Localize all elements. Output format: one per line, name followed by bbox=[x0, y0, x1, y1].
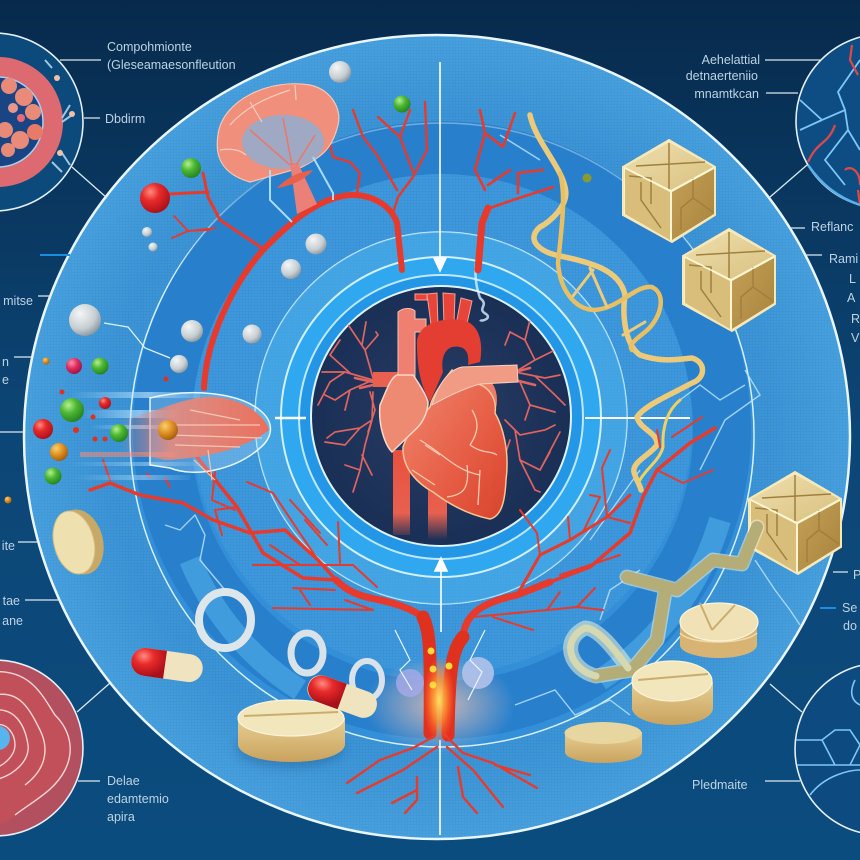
vessel: trunk bbox=[423, 617, 430, 733]
vessel: left main trunk branches bbox=[197, 457, 336, 580]
left atrium bbox=[467, 377, 497, 423]
labels: left: tae bbox=[3, 594, 20, 608]
lung vessels left bbox=[318, 320, 378, 492]
balls: colored molecules bbox=[4, 96, 592, 504]
right atrium bbox=[380, 375, 428, 452]
rings bbox=[199, 592, 382, 699]
vessel: left red ball branch bbox=[170, 173, 262, 248]
molecule chain bbox=[571, 527, 757, 676]
heart bbox=[373, 293, 518, 540]
superior vena cava bbox=[398, 308, 426, 385]
inset: top-left cell bbox=[0, 33, 83, 211]
lung mushroom shape bbox=[217, 84, 339, 222]
labels: top-left: (Gleseamaesonfleution bbox=[107, 58, 236, 72]
labels: right: Rami bbox=[829, 252, 858, 266]
vessel: roots bbox=[347, 735, 537, 813]
labels: top-right bbox=[686, 53, 760, 101]
vessel: arc branches bbox=[328, 102, 427, 213]
vessel: left main bbox=[336, 580, 423, 617]
labels: bottom-left bbox=[107, 774, 169, 824]
labels: top-left: Compohmionte bbox=[107, 40, 192, 54]
labels: left: mitse bbox=[3, 294, 33, 308]
muscle bulb with particle stream bbox=[70, 392, 270, 480]
labels: right: Se bbox=[842, 601, 857, 615]
panel: central heart disc bbox=[311, 263, 571, 546]
labels: top-left: Dbdirm bbox=[105, 112, 145, 126]
labels: left: ite bbox=[2, 539, 15, 553]
coronary vessels bbox=[412, 410, 497, 505]
labels: left: n bbox=[2, 355, 9, 369]
lung vessels right bbox=[505, 320, 565, 492]
labels: right: do bbox=[843, 619, 857, 633]
ventricles bbox=[403, 370, 507, 519]
vessel: left branches bbox=[103, 460, 377, 610]
stream lines bbox=[70, 392, 200, 398]
glowing haze bbox=[365, 657, 515, 753]
tablet: scored bbox=[632, 661, 713, 725]
labels: bottom-left: Delae bbox=[107, 774, 140, 788]
pulmonary stub bbox=[373, 372, 398, 387]
inset: bottom-left rings bbox=[0, 660, 83, 836]
vessel: right main bbox=[463, 582, 550, 637]
labels: right: V bbox=[851, 331, 860, 345]
balls: grey molecules bbox=[69, 61, 351, 373]
muscle bbox=[120, 397, 269, 460]
tablet: stacked bbox=[680, 603, 758, 658]
labels: right: Reflanc bbox=[811, 220, 853, 234]
tablet: bottom small bbox=[564, 722, 642, 763]
labels: right: A bbox=[847, 291, 856, 305]
inset: bottom-right structure bbox=[795, 663, 860, 835]
electric cracks bbox=[165, 135, 800, 715]
labels: right: L bbox=[849, 272, 856, 286]
labels: top-left bbox=[105, 40, 236, 126]
labels: left: ane bbox=[2, 614, 23, 628]
labels: left: e bbox=[2, 373, 9, 387]
labels: top-right: detnaerteniio bbox=[686, 69, 758, 83]
inferior vessels bbox=[393, 450, 447, 540]
white cross arrows bbox=[275, 62, 690, 835]
vessel: right trunk bbox=[478, 208, 488, 270]
labels: top-right: mnamtkcan bbox=[694, 87, 759, 101]
capsule: right bbox=[304, 672, 381, 722]
smoke wisp bbox=[475, 263, 488, 321]
vessel: right branches bbox=[473, 417, 713, 630]
tablet: left tilted bbox=[47, 504, 110, 580]
inset: top-right network bbox=[796, 34, 860, 208]
labels: bottom-left: edamtemio bbox=[107, 792, 169, 806]
pulmonary trunk bbox=[432, 365, 518, 405]
labels: top-right: Aehelattial bbox=[702, 53, 760, 67]
glass shell bbox=[150, 393, 270, 472]
vessel: main arc bbox=[204, 195, 402, 388]
cube: lower bbox=[749, 472, 841, 574]
labels: bottom-left: apira bbox=[107, 810, 135, 824]
labels: bottom-right: Pledmaite bbox=[692, 778, 748, 792]
DNA helix bbox=[530, 115, 702, 490]
upper vessels bbox=[170, 102, 553, 388]
vessel: right trunk branches bbox=[475, 110, 553, 208]
glowing junction bbox=[395, 630, 494, 744]
labels: left bbox=[2, 294, 33, 628]
aortic arch bbox=[417, 319, 481, 402]
cube: upper bbox=[623, 140, 715, 242]
cube: middle bbox=[683, 229, 775, 331]
labels: right bbox=[811, 220, 860, 633]
tablet: bottom large bbox=[238, 700, 345, 765]
capsule: left bbox=[129, 646, 205, 684]
aortic branches bbox=[415, 293, 472, 328]
lower vascular tree bbox=[90, 417, 715, 813]
labels: right: R bbox=[851, 312, 860, 326]
